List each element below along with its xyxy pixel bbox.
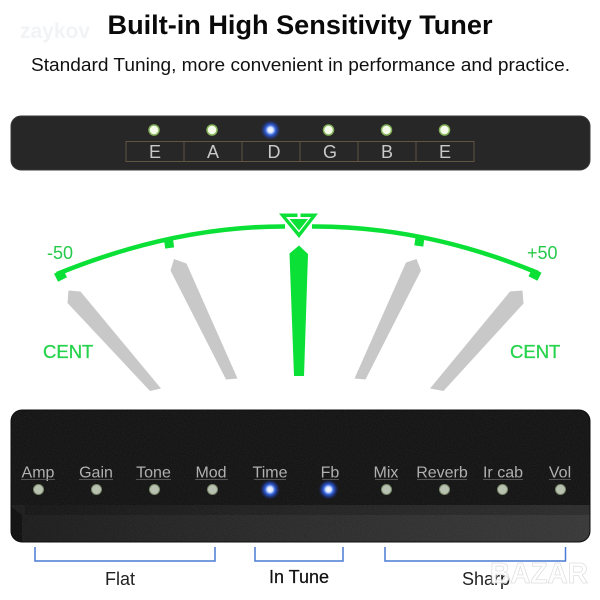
label: in tune: In Tune bbox=[269, 567, 329, 587]
label: flat: Flat bbox=[105, 569, 135, 589]
watermark: bazar: BAZAR bbox=[490, 558, 588, 590]
parameter labels: Tone bbox=[136, 464, 171, 482]
arc ticks bbox=[54, 235, 541, 282]
parameter labels bbox=[22, 464, 571, 482]
label: sharp: Sharp bbox=[462, 569, 510, 589]
needle: mid right bbox=[354, 259, 421, 380]
needle: far left bbox=[68, 290, 161, 391]
scale label: +50: +50 bbox=[527, 243, 558, 263]
scale label: -50: -50 bbox=[47, 243, 73, 263]
parameter labels: Gain bbox=[79, 464, 113, 482]
needle: far right bbox=[430, 290, 524, 391]
gauge arc bbox=[57, 226, 538, 274]
watermark: zaykov: zaykov bbox=[20, 20, 90, 43]
bracket: sharp bbox=[385, 547, 566, 561]
string name grid: A bbox=[207, 142, 219, 162]
string LEDs bbox=[149, 120, 450, 140]
parameter labels: Ir cab bbox=[483, 464, 523, 482]
pointer triangle bbox=[279, 213, 318, 238]
parameter labels: Mix bbox=[374, 464, 398, 482]
string name grid: G bbox=[323, 142, 337, 162]
bracket: flat bbox=[35, 547, 215, 561]
label underlines bbox=[21, 478, 571, 480]
title: Built-in High Sensitivity Tuner bbox=[108, 10, 493, 40]
needle: mid left bbox=[170, 259, 238, 380]
string name grid: E bbox=[439, 142, 451, 162]
cent label left: CENT bbox=[43, 341, 93, 362]
parameter labels: Time bbox=[253, 464, 288, 482]
panel: string tuner bbox=[11, 116, 590, 170]
parameter labels: Vol bbox=[549, 464, 571, 482]
parameter labels: Mod bbox=[195, 464, 227, 482]
string name grid: D bbox=[268, 142, 280, 162]
parameter LEDs bbox=[34, 480, 566, 500]
parameter labels: Amp bbox=[22, 464, 55, 482]
string name grid: E bbox=[149, 142, 161, 162]
gauge bbox=[43, 213, 560, 391]
subtitle: Standard Tuning, more convenient in performance and practice. bbox=[31, 54, 570, 75]
parameter labels: Reverb bbox=[416, 464, 468, 482]
cent label right: CENT bbox=[510, 341, 560, 362]
string name grid bbox=[126, 142, 474, 162]
panel: pedal indicators bbox=[11, 410, 590, 542]
string name grid: B bbox=[381, 142, 393, 162]
needle: center bbox=[290, 246, 308, 376]
parameter labels: Fb bbox=[321, 464, 339, 482]
bracket: in tune bbox=[255, 547, 343, 561]
